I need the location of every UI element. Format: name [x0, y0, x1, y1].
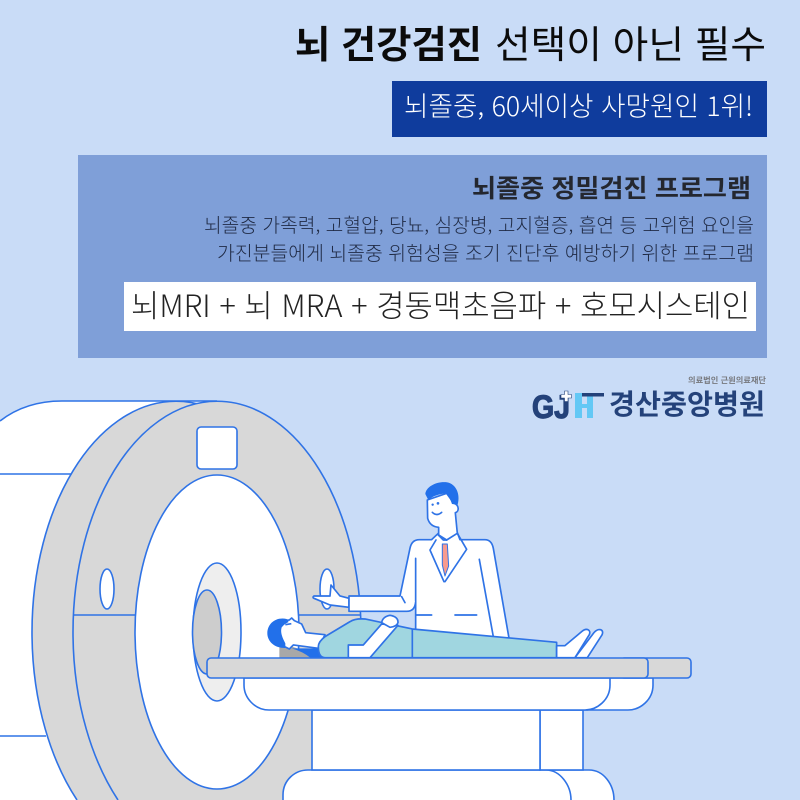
- doctor head: [427, 493, 458, 540]
- patient shoulder: [292, 648, 325, 658]
- patient arm: [348, 624, 398, 658]
- scanner bore opening: [135, 475, 299, 789]
- patient gown: [318, 619, 557, 658]
- patient hand: [382, 615, 398, 627]
- coat lapels: [430, 533, 467, 582]
- scanner ring side: [32, 401, 320, 800]
- patient table top: [207, 658, 691, 678]
- column: [540, 710, 583, 770]
- doctor forearm: [349, 596, 416, 611]
- program description: [204, 209, 754, 266]
- pillow: [279, 646, 311, 658]
- title: 선택이 아닌 필수: [495, 25, 766, 67]
- doctor hair: [425, 482, 459, 505]
- table support: [560, 678, 653, 710]
- bore tube: [193, 563, 241, 701]
- patient feet: [557, 629, 590, 658]
- MRI scanner: [0, 401, 361, 800]
- hospital logo: 의료법인 근원의료재단: [688, 375, 767, 385]
- necktie: [442, 544, 449, 576]
- scanner ring front: [73, 401, 361, 800]
- test list box: 뇌MRI + 뇌 MRA + 경동맥초음파 + 호모시스테인: [131, 281, 750, 326]
- title: 뇌 건강검진: [295, 25, 482, 67]
- doctor: [313, 482, 509, 640]
- banner: stroke mortality: 뇌졸중, 60세이상 사망원인 1위!: [404, 85, 753, 124]
- program description: 가진분들에게 뇌졸중 위험성을 조기 진단후 예방하기 위한 프로그램: [217, 237, 754, 266]
- patient head and neck: [278, 618, 325, 649]
- bore depth: [192, 590, 222, 674]
- patient hair: [267, 619, 289, 648]
- scanner top window: [197, 427, 237, 469]
- title: [295, 25, 766, 67]
- patient: [267, 615, 603, 658]
- patient table base: [244, 678, 653, 800]
- doctor coat: [400, 533, 509, 640]
- panel: stroke screening program: [78, 155, 767, 358]
- program heading: 뇌졸중 정밀검진 프로그램: [472, 175, 751, 203]
- scanner rear housing: [0, 401, 217, 800]
- hospital logo: [532, 375, 767, 425]
- doctor hand: [313, 585, 349, 607]
- banner: stroke mortality: [392, 81, 767, 137]
- patient eye: [285, 621, 291, 627]
- hospital logo: GJ: [532, 389, 570, 425]
- bottom plinth: [328, 770, 614, 800]
- left oval handle: [100, 569, 114, 609]
- right oval handle: [320, 569, 334, 609]
- hospital logo: 경산중앙병원: [609, 389, 765, 420]
- program description: 뇌졸중 가족력, 고혈압, 당뇨, 심장병, 고지혈증, 흡연 등 고위험 요인을: [204, 209, 754, 238]
